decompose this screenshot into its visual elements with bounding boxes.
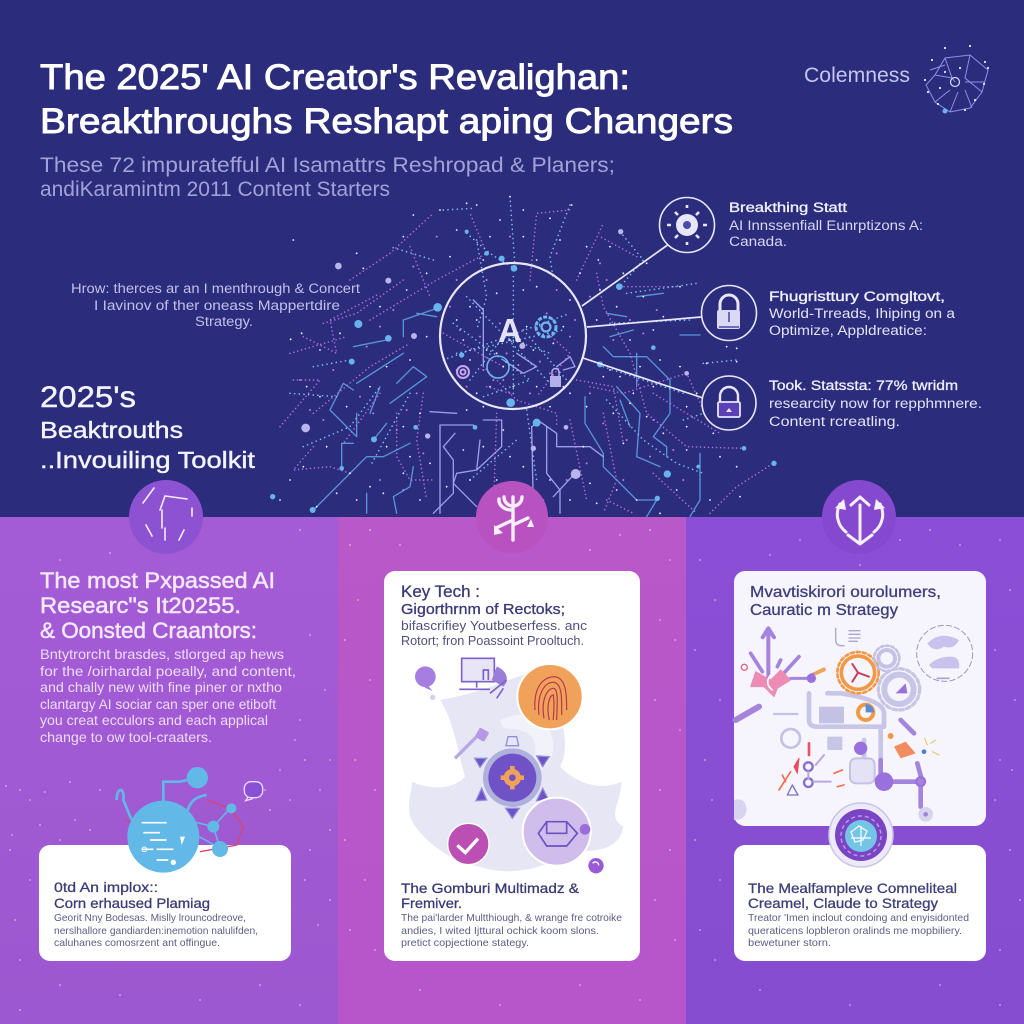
callout: fhugristtury	[769, 289, 956, 338]
card body: Treator 'Imen inclout condoing and enyisidonted	[748, 912, 969, 924]
bubble	[415, 666, 436, 700]
callout icon: gear target	[660, 198, 714, 252]
subtitle	[40, 154, 615, 201]
callout icon: padlock 1	[702, 286, 756, 340]
left intro text: I Iavinov of ther oneass Mappertdire	[94, 298, 340, 313]
list	[836, 628, 860, 646]
card body	[54, 912, 258, 949]
left card	[39, 845, 291, 961]
left body text: clantargy AI sociar can sper one etiboft	[40, 696, 276, 712]
card heading: Gigorthrnm of Rectoks;	[401, 601, 565, 618]
gray gears	[878, 650, 895, 667]
left heading: The most Pxpassed AI	[40, 568, 275, 593]
left heading	[40, 568, 275, 643]
left intro text: Hrow: therces ar an I menthrough & Concert	[71, 281, 360, 296]
left gauge	[781, 729, 800, 748]
lower body: pretict copjectione stategy.	[401, 937, 529, 949]
medal icon	[829, 803, 893, 867]
left intro text: Strategy.	[195, 314, 253, 329]
lower body: andies, I wited Ijttural ochick koom slons.	[401, 925, 599, 937]
robot	[850, 758, 875, 783]
pen	[455, 733, 480, 758]
header background	[0, 0, 1024, 518]
callout icon: padlock 2	[702, 376, 756, 430]
callout: fhugristtury: World-Trreads, Ihiping on a	[769, 306, 956, 321]
card body: caluhanes comosrzent ant offingue.	[54, 937, 220, 949]
left body text: Bntytrorcht brasdes, stlorged ap hews	[40, 646, 284, 662]
right bottom card	[734, 845, 986, 961]
gear icon	[536, 317, 556, 337]
card heading	[750, 584, 941, 619]
card heading: Cauratic m Strategy	[750, 602, 898, 619]
subtitle: These 72 impuratefful AI Isamattrs Reshropad & Planers;	[40, 154, 615, 177]
card heading: 0td An implox::	[54, 879, 158, 895]
icon: check badge	[448, 823, 489, 865]
lock icon	[550, 369, 561, 387]
speckles	[695, 530, 1020, 1005]
logo: network globe	[925, 46, 988, 114]
lower heading: Fremiver.	[401, 895, 462, 911]
card heading: Mvavtiskirori ourolumers,	[750, 584, 941, 601]
letter A: A	[498, 312, 522, 349]
title: Breakthroughs Reshapt aping Changers	[40, 102, 733, 141]
section heading	[40, 381, 256, 473]
section heading: Beaktrouths	[40, 417, 183, 443]
right top card	[734, 571, 986, 826]
callout: breakthing: Canada.	[729, 234, 787, 249]
title: The 2025' AI Creator's Revalighan:	[40, 58, 630, 97]
connector lines	[582, 244, 703, 398]
callout: fhugristtury: Fhugristtury Comgltovt,	[769, 289, 945, 304]
arrow	[763, 628, 774, 677]
tab icon: anchor arrows	[822, 480, 896, 554]
illustration: process machinery	[734, 625, 973, 822]
globe outline	[487, 356, 509, 378]
icon: blue chat network	[117, 767, 263, 873]
warm shapes	[894, 742, 916, 758]
lower heading: The Gomburi Multimadz &	[401, 880, 580, 896]
left body text	[40, 646, 296, 745]
card heading	[54, 879, 210, 911]
title	[40, 58, 733, 141]
pipes	[809, 693, 921, 782]
callout: breakthing: Breakthing Statt	[729, 200, 847, 215]
spiral icon	[457, 366, 469, 378]
monitor	[459, 658, 507, 698]
pie	[858, 705, 873, 720]
callout: stats	[769, 378, 982, 429]
tab icon: constellation	[129, 480, 203, 554]
orange gear	[841, 656, 875, 689]
swirl backdrop	[409, 670, 623, 871]
card body	[748, 912, 969, 949]
callout: breakthing	[729, 200, 923, 249]
subtitle: andiKaramintm 2011 Content Starters	[40, 178, 390, 201]
card body: bewetuner storn.	[748, 937, 831, 949]
card subtext: bifascrifiey Youtbeserfess. anc	[401, 618, 588, 633]
panel: left	[0, 517, 338, 1024]
left body text: for the /oirhardal poeally, and content,	[40, 663, 296, 679]
card heading: Creamel, Claude to Strategy	[748, 895, 938, 911]
left heading: & Oonsted Craantors:	[40, 618, 257, 643]
lower heading	[401, 880, 580, 911]
central AI circle	[440, 263, 586, 409]
tab icon: tool tree	[476, 481, 548, 553]
burst	[751, 670, 791, 697]
section heading: 2025's	[40, 381, 136, 414]
card subtext	[401, 618, 588, 648]
card body: queraticens lopbleron oralinds me mopbiliery.	[748, 925, 962, 937]
brand name: Colemness	[804, 64, 910, 87]
small badge	[588, 858, 604, 873]
panel: middle	[338, 517, 686, 1024]
section heading: ..Invouiling Toolkit	[40, 447, 256, 473]
speckles	[6, 530, 330, 1010]
card heading	[401, 582, 565, 618]
left body text: and chally new with fine piner or nxtho	[40, 679, 282, 695]
speckles	[345, 530, 680, 1005]
callout: stats: Content rcreatling.	[769, 414, 900, 429]
callout: stats: Took. Statssta: 77% twridm	[769, 378, 958, 393]
neural network illustration	[270, 197, 777, 517]
illustration: technology cluster	[409, 658, 623, 873]
panel: right	[686, 517, 1024, 1024]
card subtext: Rotort; fron Poassoint Prooltuch.	[401, 633, 584, 648]
dashed globe	[917, 625, 973, 681]
left body text: you creat ecculors and each applical	[40, 712, 268, 728]
card heading: Key Tech :	[401, 582, 480, 601]
card heading	[748, 880, 957, 911]
card body: Georit Nny Bodesas. Mislly lrouncodreove,	[54, 912, 246, 924]
lower body: The pai'larder Multthiough, & wrange fre cotroike	[401, 912, 622, 924]
icon: share circle	[523, 798, 591, 866]
lower body	[401, 912, 622, 949]
callout: fhugristtury: Optimize, Appldreatice:	[769, 323, 927, 338]
icon: fingerprint	[517, 664, 583, 729]
left body text: change to ow tool-craaters.	[40, 729, 212, 745]
middle card	[384, 571, 640, 961]
callout: breakthing: AI Innssenfiall Eunrptizons A:	[729, 218, 923, 233]
card heading: The Mealfampleve Comneliteal	[748, 880, 957, 896]
callout: stats: researcity now for repphmnere.	[769, 396, 982, 411]
icon: central gear	[475, 737, 549, 818]
left heading: Researc"s It20255.	[40, 593, 241, 618]
card body: nerslhallore gandiarden:inemotion nalulifden,	[54, 925, 258, 937]
left intro text	[71, 281, 360, 329]
card heading: Corn erhaused Plamiag	[54, 895, 210, 911]
